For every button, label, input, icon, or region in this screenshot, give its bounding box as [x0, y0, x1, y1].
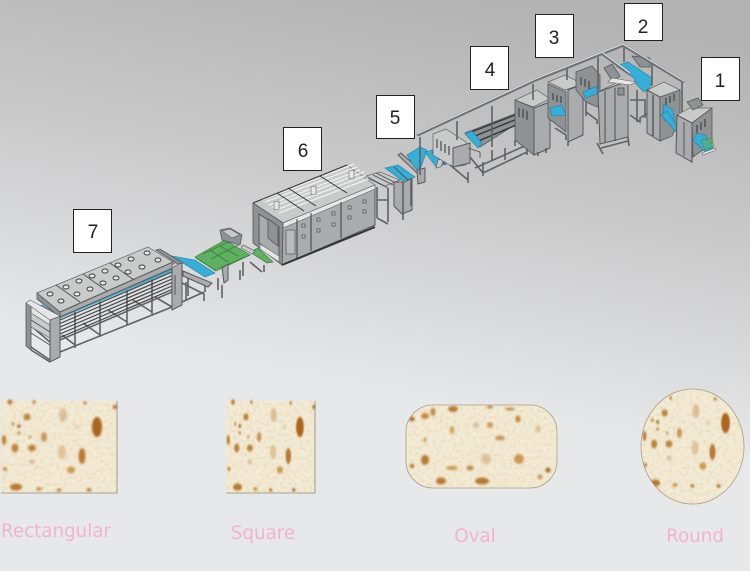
number box 7: [74, 210, 112, 252]
machine 5: sheeter with blue conveyors: [366, 147, 453, 224]
label: Round: Round: [666, 526, 724, 547]
flatbread: round: [641, 389, 744, 504]
number box 5: 5: [390, 108, 400, 129]
flatbread: square: [226, 400, 315, 493]
number box 6: [284, 128, 322, 170]
number box 4: [470, 46, 508, 90]
number box 7: 7: [88, 222, 98, 243]
machine 4: inclined conveyor and rear cabinet: [433, 113, 527, 183]
number box 3: [536, 14, 574, 58]
number box 2: [624, 4, 662, 40]
number box 2: 2: [638, 17, 648, 38]
tall control cabinet: [597, 80, 630, 154]
number box 1: 1: [715, 71, 725, 92]
number box 5: [376, 96, 414, 138]
label: Oval: Oval: [454, 526, 496, 547]
flatbread: oval: [406, 405, 557, 488]
label: Square: Square: [231, 523, 295, 544]
flatbread: rectangular: [1, 400, 117, 493]
cabinet group 1: feeder and cabinets: [647, 82, 716, 163]
machine 7: cooling conveyor: [26, 247, 204, 362]
number box 6: 6: [298, 141, 308, 162]
number box 1: [702, 58, 740, 100]
overhead frame rail: [417, 44, 684, 175]
number box 3: 3: [549, 28, 559, 49]
label: Rectangular: Rectangular: [1, 521, 112, 542]
machine 2: blue sheeting conveyors: [604, 56, 652, 122]
cabinet group 3: [515, 66, 600, 156]
number box 4: 4: [485, 60, 496, 81]
machine 6: oven: [253, 164, 375, 265]
transfer conveyors: blue and green: [156, 228, 273, 298]
